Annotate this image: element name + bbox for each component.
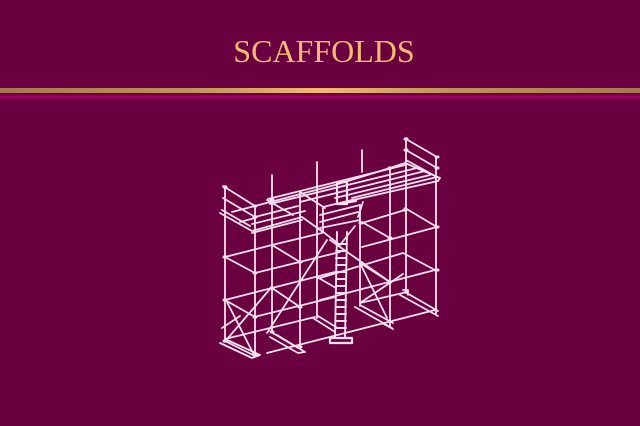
work platform deck [220, 163, 440, 245]
platform hatch ladder [337, 182, 356, 204]
magenta glow under divider [0, 94, 640, 100]
right guard rail [406, 139, 437, 177]
ladder [330, 232, 352, 343]
transverse ties [225, 208, 437, 356]
longitudinal ledgers [225, 210, 437, 353]
ladder foot plate [330, 338, 352, 343]
title: SCAFFOLDS [233, 33, 415, 69]
scaffold structure [220, 138, 440, 358]
base sole boards [220, 290, 438, 358]
joint couplers [224, 139, 438, 355]
left guard rail [222, 186, 255, 226]
gold divider bar [0, 88, 640, 93]
vertical standards [225, 138, 436, 356]
diagonal braces [222, 240, 403, 355]
